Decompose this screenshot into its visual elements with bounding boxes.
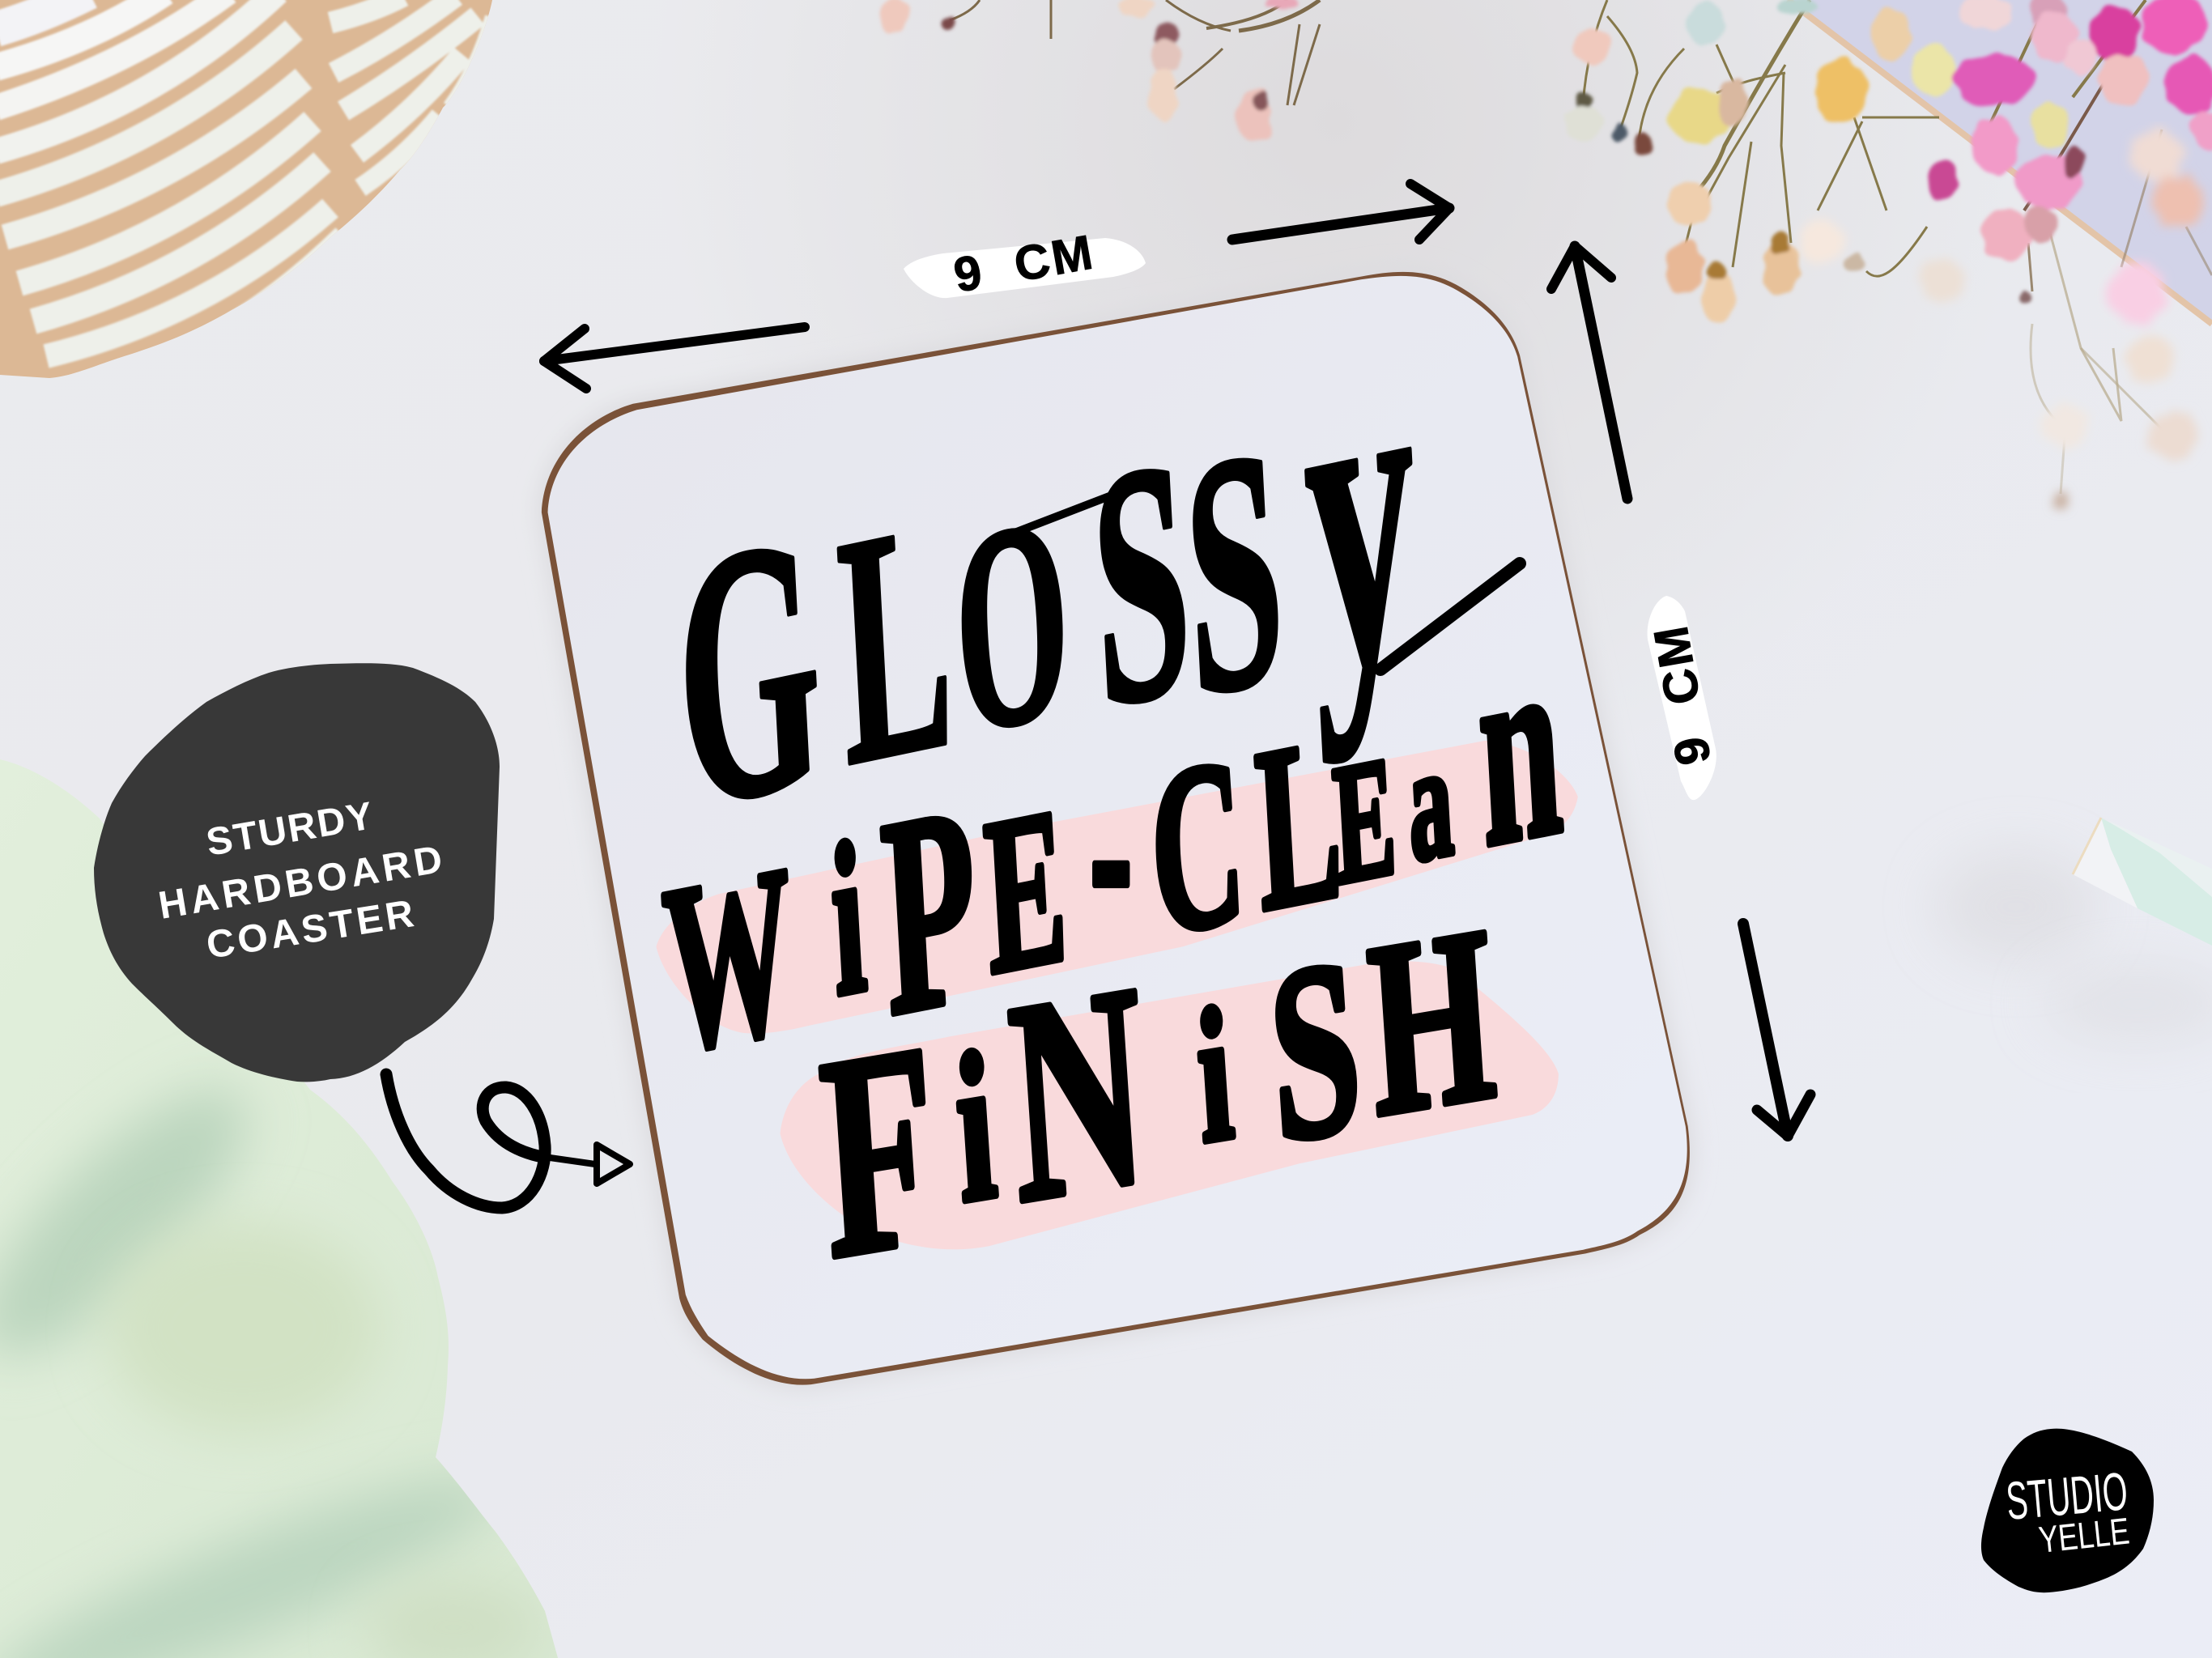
coaster lettering: Finish: S xyxy=(1262,906,1368,1196)
coaster lettering: Glossy: S xyxy=(1084,385,1198,780)
callout: sturdy hardboard coaster badge xyxy=(94,663,500,1082)
coaster lettering: Wipe-Clean: P xyxy=(875,745,985,1075)
coaster with brown hardboard edge xyxy=(542,272,1690,1385)
dried flowers: left cluster xyxy=(879,0,1320,142)
coaster lettering: Wipe-Clean: E xyxy=(1329,721,1400,920)
pen lying at right edge xyxy=(1935,818,2212,1044)
coaster lettering: Wipe-Clean: i xyxy=(825,795,871,1042)
top dimension label: 9 CM xyxy=(904,224,1146,303)
coaster lettering: Wipe-Clean: a xyxy=(1403,708,1457,897)
logo: Studio Yelle badge: YELLE xyxy=(2037,1510,2131,1561)
coaster lettering: Glossy: O xyxy=(948,455,1076,797)
arrow: looping arrow from badge to coaster edge xyxy=(386,1074,630,1208)
logo: Studio Yelle badge: STUDIO xyxy=(2004,1460,2130,1531)
coaster lettering: Wipe-Clean: L xyxy=(1250,687,1347,960)
green scalloped plate xyxy=(0,729,583,1658)
coaster lettering: Wipe-Clean: n xyxy=(1471,589,1568,903)
coaster lettering: Finish xyxy=(813,874,1502,1320)
pink highlight behind finish xyxy=(781,961,1559,1249)
arrow: right dimension pointing up xyxy=(1551,246,1627,499)
coaster lettering: Wipe-Clean: - xyxy=(1090,716,1133,985)
coaster lettering: Glossy: S xyxy=(1177,375,1291,769)
coaster lettering: Glossy: G xyxy=(668,457,830,886)
coaster lettering: Finish: i xyxy=(949,1006,1002,1248)
coaster lettering: Glossy xyxy=(668,261,1520,886)
coaster lettering: Wipe-Clean: E xyxy=(980,760,1072,1021)
right dimension label: 9 CM: 9 CM xyxy=(1643,620,1721,769)
coaster lettering: Wipe-Clean: C xyxy=(1144,706,1250,986)
coaster lettering: Wipe-Clean xyxy=(658,589,1568,1104)
arrow: top dimension pointing right xyxy=(1232,184,1449,240)
coaster lettering: Finish: N xyxy=(1002,923,1154,1264)
pink highlight behind wipe-clean xyxy=(656,741,1578,1034)
coaster lettering: Glossy: L xyxy=(832,449,959,835)
callout: sturdy hardboard coaster badge: HARDBOARD xyxy=(155,838,445,928)
logo: Studio Yelle badge xyxy=(1981,1429,2154,1592)
top dimension label: 9 CM: 9 CM xyxy=(950,224,1099,303)
dried flowers: right cluster xyxy=(1566,0,2212,509)
ceramic bowl with terracotta stripes xyxy=(0,0,518,389)
arrow: top dimension pointing left xyxy=(544,327,805,389)
callout: sturdy hardboard coaster badge: COASTER xyxy=(203,892,417,967)
coaster lettering: Glossy: y xyxy=(1294,261,1428,767)
coaster lettering: Finish: F xyxy=(813,983,946,1320)
coaster lettering: Finish: H xyxy=(1361,874,1502,1169)
coaster lettering: Finish: i xyxy=(1191,967,1238,1183)
lavender card behind the flowers xyxy=(1788,0,2212,324)
callout: sturdy hardboard coaster badge: STURDY xyxy=(203,794,376,865)
arrow: right dimension pointing down xyxy=(1743,924,1810,1136)
coaster lettering: Wipe-Clean: W xyxy=(658,816,800,1104)
